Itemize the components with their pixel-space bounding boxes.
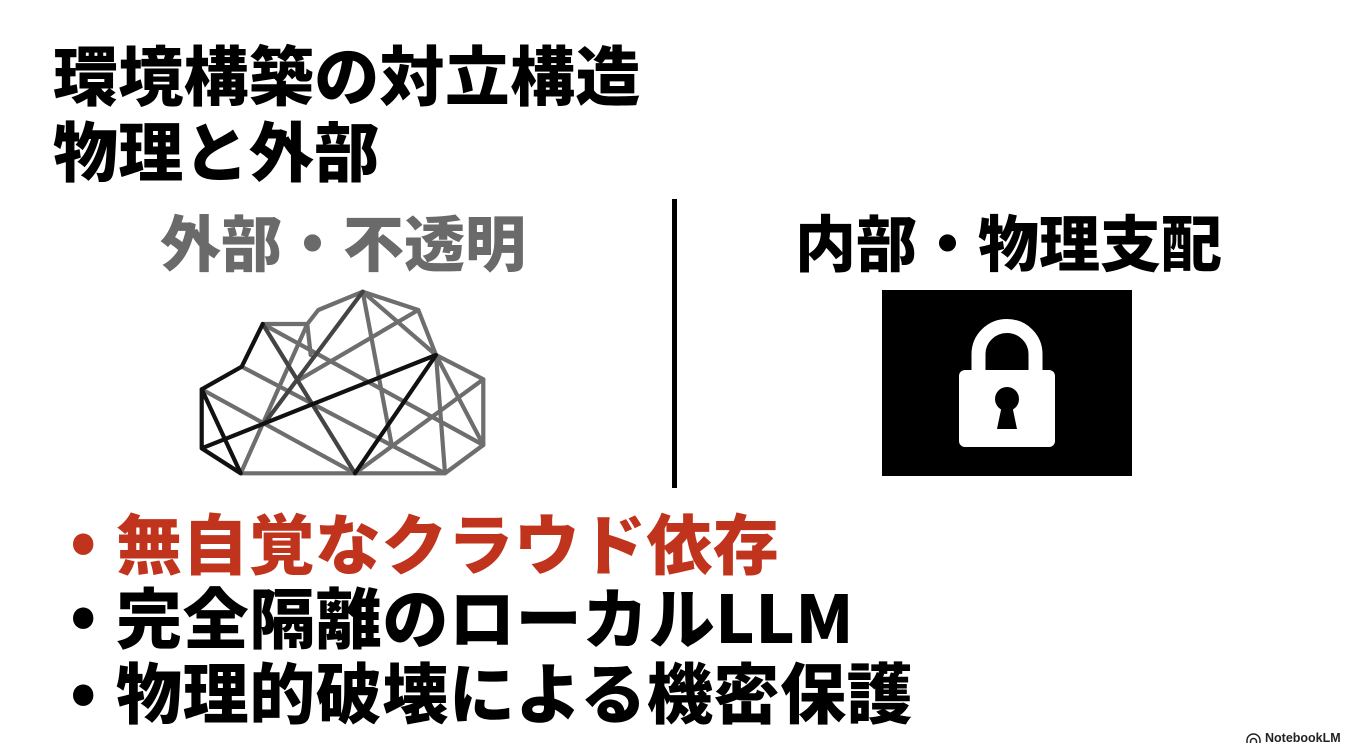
bullet 3: •: [70, 639, 96, 735]
item: physical destruction: 物理的破壊による機密保護: [116, 642, 913, 738]
heading: internal: 内部・物理支配: [795, 195, 1222, 284]
bullet 2: •: [70, 562, 96, 658]
bullet list: [70, 488, 913, 738]
title: [53, 25, 641, 195]
heading: external: 外部・不透明: [160, 195, 526, 284]
center divider: [672, 199, 677, 488]
title: 環境構築の対立構造: [53, 25, 641, 119]
item: cloud dependency: 無自覚なクラウド依存: [116, 493, 779, 589]
NotebookLM watermark: [1246, 731, 1341, 745]
bullet 1: •: [70, 488, 96, 584]
watermark text: NotebookLM: [1265, 731, 1341, 745]
icon: NotebookLM logo: [1246, 733, 1261, 743]
title: 物理と外部: [53, 101, 380, 195]
icon: padlock on black panel: [882, 290, 1132, 476]
icon: wireframe cloud: [200, 290, 486, 476]
item: local LLM: 完全隔離のローカルLLM: [116, 567, 854, 663]
